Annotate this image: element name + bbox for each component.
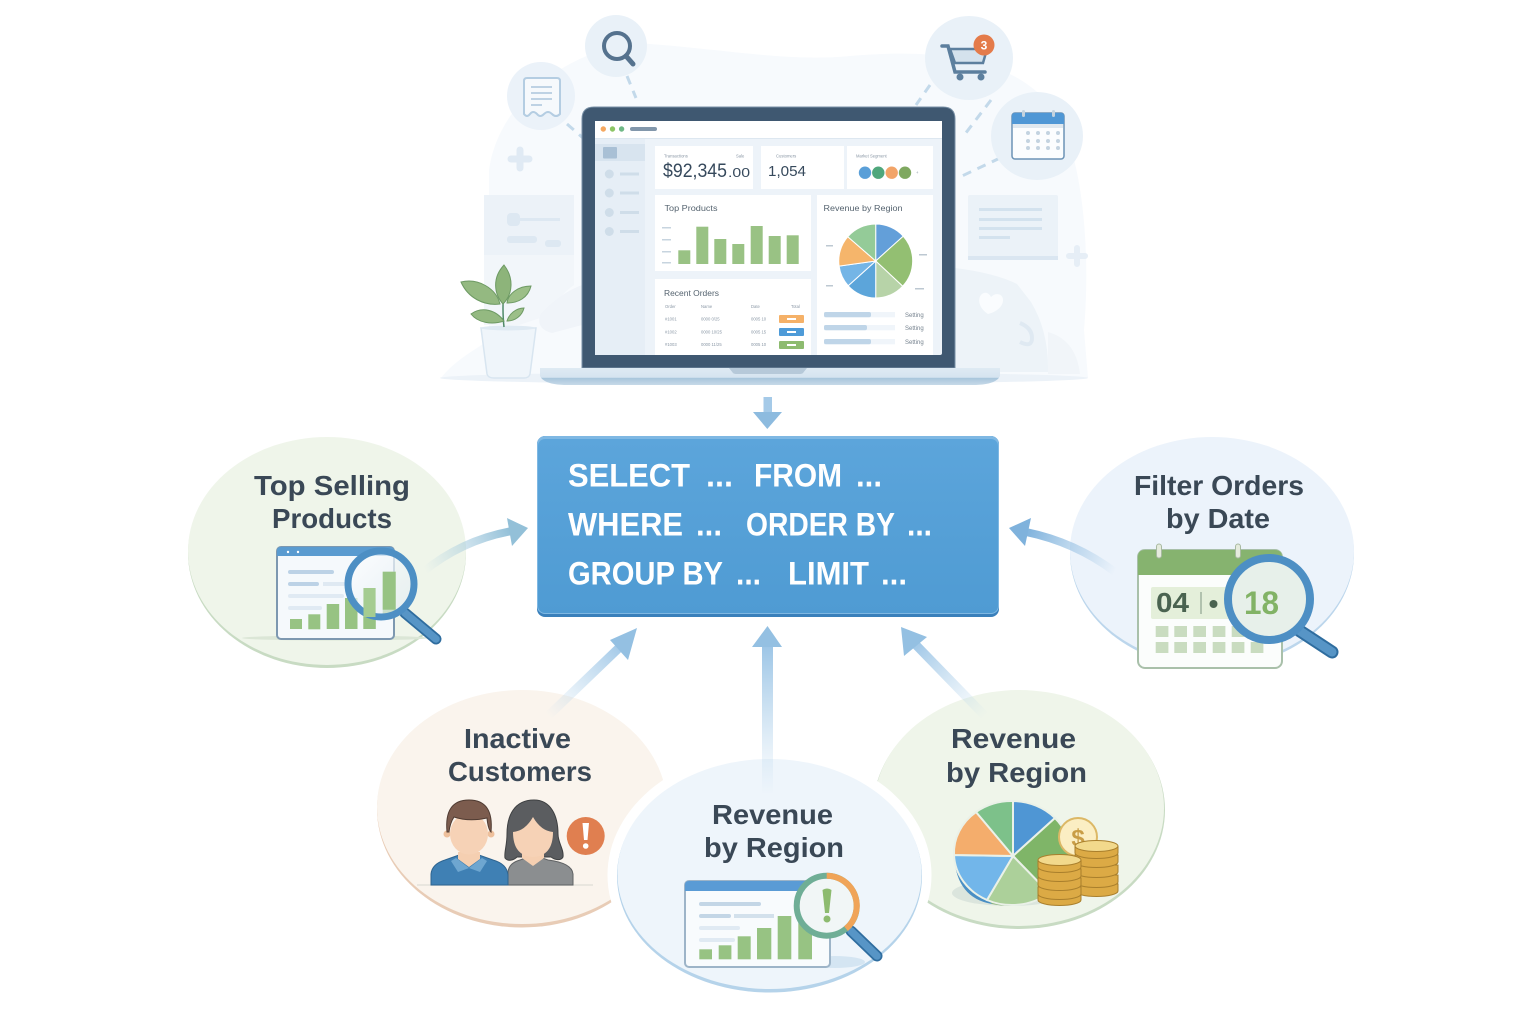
card: sales total: .00 [728, 165, 750, 180]
magnifier [797, 876, 877, 956]
SQL keywords: ... [907, 507, 932, 543]
dashboard screen [595, 121, 942, 355]
icon: pie chart with coins [952, 801, 1118, 906]
card: recent orders table [655, 279, 811, 355]
magnifier [1228, 558, 1332, 652]
icon: report window with alert magnifier [685, 876, 877, 968]
icon: calendar [991, 92, 1083, 180]
icon: calendar with magnifier: 04 [1156, 587, 1189, 618]
panel: filter orders by date [1070, 437, 1354, 668]
card: top products bar chart [655, 195, 811, 271]
SQL keywords: ... [706, 458, 733, 494]
cart badge: 3 [981, 38, 988, 52]
card: recent orders table: 0000 11/25 [701, 342, 722, 347]
card: recent orders table: 0005 10 [751, 342, 767, 347]
SQL keywords: ... [696, 507, 722, 543]
heading [448, 723, 592, 787]
icon: receipt [507, 62, 575, 130]
man [431, 800, 508, 885]
card: sales total: Sale [736, 154, 745, 158]
card: recent orders table: 0000 10/25 [701, 330, 723, 334]
card: sales total: Transactions [664, 154, 688, 158]
heading: by Region [946, 757, 1087, 788]
heading: Filter Orders [1134, 470, 1304, 501]
heading: by Date [1166, 503, 1270, 534]
background mug with heart [955, 268, 1080, 374]
sidebar [595, 139, 645, 355]
card: order count: Customers [776, 154, 796, 158]
SQL keywords: LIMIT [788, 556, 869, 592]
laptop with dashboard [188, 107, 1354, 1001]
laptop bezel [582, 107, 955, 368]
card: recent orders table: #1003 [665, 342, 677, 347]
magnifier: 18 [1244, 585, 1279, 621]
heading: Inactive [464, 723, 571, 754]
SQL keywords: FROM [754, 458, 842, 494]
arrow: revenue coins to SQL box [901, 627, 985, 716]
SQL keywords: GROUP BY [568, 556, 723, 592]
arrow: filter orders to SQL box [1009, 518, 1115, 572]
panel: top selling products [188, 437, 466, 668]
coin stack: front [1038, 854, 1081, 906]
SQL keywords: ... [881, 556, 907, 592]
arrow: inactive customers to SQL box [548, 628, 637, 716]
card: revenue by region pie: Setting [905, 340, 924, 346]
arrow: revenue report to SQL box [752, 626, 782, 795]
arrow: top selling products to SQL box [423, 518, 528, 572]
card: recent orders table: 0005 15 [751, 330, 767, 334]
card: top products bar chart: Top Products [664, 204, 718, 213]
card: revenue by region pie: Setting [905, 326, 924, 332]
card: recent orders table: Name [701, 304, 713, 309]
window controls [601, 126, 657, 132]
heading [704, 799, 844, 863]
icon: potted plant [461, 265, 536, 378]
card: sales total: $92,345 [663, 161, 727, 182]
SQL keywords: ... [856, 458, 882, 494]
arrow: dashboard to SQL box [753, 397, 782, 429]
card: order count: 1,054 [768, 163, 806, 180]
heading: by Region [704, 832, 844, 863]
pie chart [954, 801, 1070, 906]
dollar coin [1059, 818, 1097, 856]
card: recent orders table: Date [751, 304, 761, 309]
dashed connector lines [567, 76, 1000, 176]
heading: Products [272, 503, 392, 534]
SQL keywords: SELECT [568, 458, 690, 494]
panel: revenue by region (report) [608, 749, 932, 1001]
heading [1134, 470, 1304, 534]
background illustration blob [440, 44, 1088, 384]
card: recent orders table: Order [665, 304, 676, 309]
heading [946, 723, 1087, 788]
magnifier [348, 551, 436, 639]
panel: revenue by region (coins) [873, 690, 1165, 929]
card: recent orders table: Recent Orders [664, 289, 719, 298]
coin stack: rear [1075, 840, 1118, 896]
heading: Revenue [712, 799, 833, 830]
laptop base [540, 368, 1000, 385]
card: recent orders table: 0005 10 [751, 316, 767, 322]
SQL keywords: ... [736, 556, 761, 592]
panel: inactive customers [377, 690, 667, 928]
card: revenue by region pie [817, 195, 933, 355]
heading [254, 470, 410, 534]
dollar coin: $ [1071, 825, 1085, 852]
heading: Revenue [951, 723, 1076, 754]
icon: shopping cart [925, 16, 1013, 100]
card: recent orders table: Total [791, 304, 800, 309]
woman [505, 800, 573, 885]
icon: report window with magnifier [242, 547, 436, 640]
background card: right [968, 195, 1058, 260]
card: recent orders table: 0000 0/25 [701, 316, 720, 322]
heading: Customers [448, 756, 592, 787]
card: revenue by region pie: Setting [905, 313, 924, 319]
SQL query box [537, 436, 999, 617]
icon: calendar with magnifier [1138, 544, 1332, 668]
icon: inactive customers [417, 800, 605, 886]
card: revenue by region pie: Revenue by Region [824, 204, 902, 213]
SQL keywords [568, 458, 932, 592]
SQL keywords: WHERE [568, 507, 683, 543]
card: recent orders table: #1001 [665, 316, 677, 322]
card: segments: Market Segment [856, 154, 888, 158]
alert badge [567, 817, 605, 855]
icon: search [585, 15, 647, 77]
SQL keywords: ORDER BY [746, 507, 895, 543]
card: segments [847, 146, 933, 189]
card: order count [761, 146, 844, 189]
heading: Top Selling [254, 470, 410, 501]
background card: left [484, 195, 582, 333]
card: recent orders table: #1002 [665, 330, 677, 334]
card: segments: + [916, 170, 919, 175]
card: sales total [655, 146, 753, 189]
